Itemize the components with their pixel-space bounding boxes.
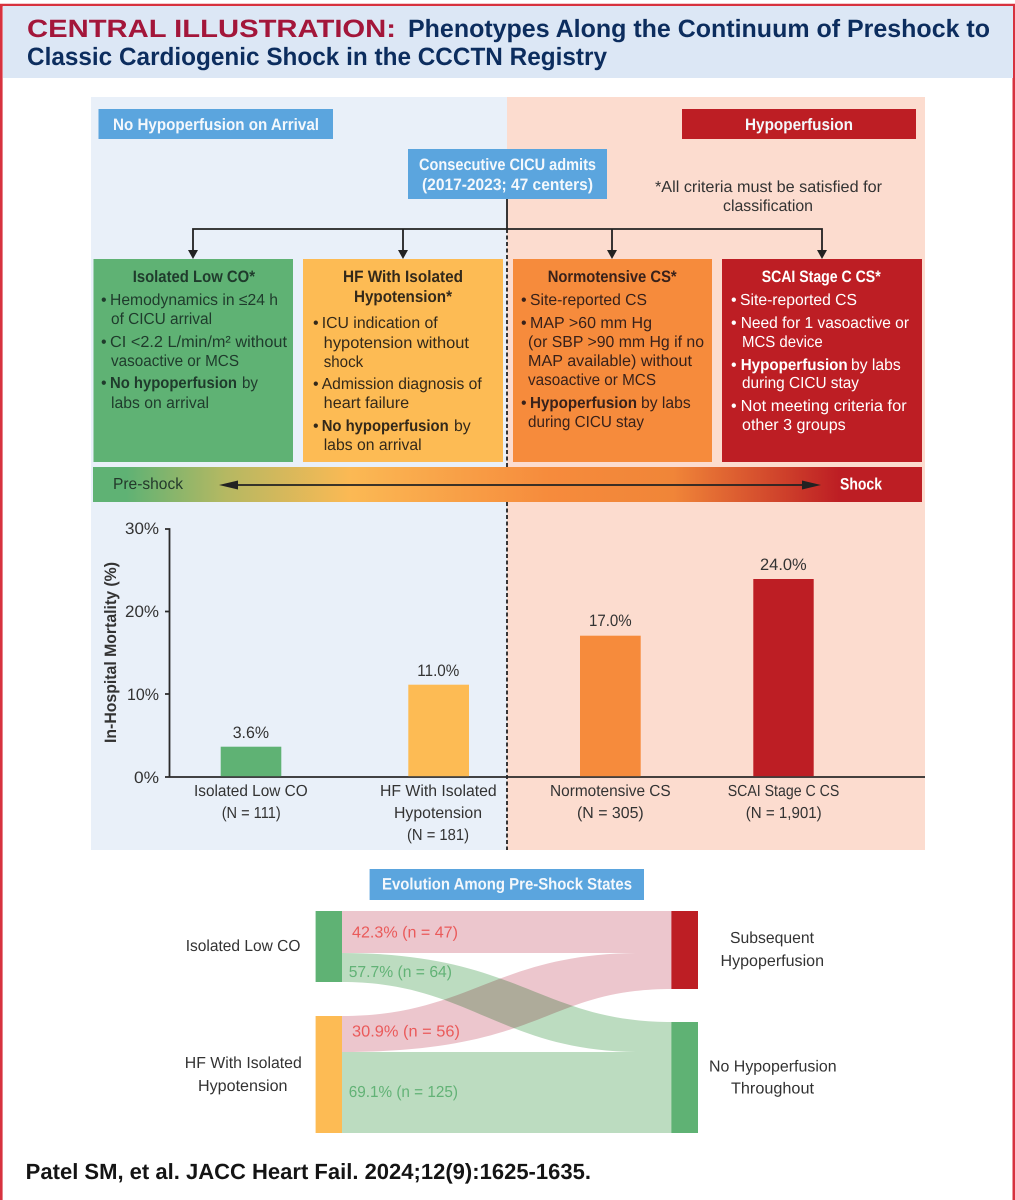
panel: normotensive CS: • [521,395,527,412]
panel: normotensive CS: MAP >60 mm Hg [530,315,652,332]
panel: HF with isolated hypotension: Admission diagnosis of [322,376,482,393]
bar: HF with isolated hypotension: 11.0% [417,662,460,680]
arrow: continuum [219,480,821,490]
bar: HF with isolated hypotension: Hypotension [394,805,482,822]
flow tree arrows [188,199,827,259]
bar: HF with isolated hypotension: HF With Isolated [380,783,497,800]
bar: SCAI stage C CS: 24.0% [760,556,807,574]
title: CENTRAL ILLUSTRATION: [27,15,396,43]
continuum bar: pre-shock to shock: Shock [840,476,883,494]
bar: isolated low CO [194,724,308,822]
panel: SCAI stage C CS: Hypoperfusion [741,357,848,374]
flow: isolated low CO to subsequent hypoperfusion [342,911,672,953]
panel: HF with isolated hypotension: heart failure [324,395,409,412]
panel: normotensive CS [513,259,712,462]
node: isolated low CO [316,911,342,982]
flow labels: 69.1% (n = 125) [349,1084,458,1101]
panel: no hypoperfusion background [91,97,507,850]
panel: normotensive CS: during CICU stay [528,414,644,431]
flow: HF to subsequent hypoperfusion [342,953,672,1052]
outcome labels: Subsequent [730,930,815,947]
outcome labels: Throughout [731,1080,815,1098]
panel: isolated low CO: labs on arrival [111,395,209,412]
panel: SCAI stage C CS: SCAI Stage C CS* [762,268,881,286]
flow: HF to no hypoperfusion [342,1052,672,1133]
chip: hypoperfusion: Hypoperfusion [745,116,853,134]
source labels: Isolated Low CO [186,938,300,955]
panel: SCAI stage C CS: other 3 groups [742,417,846,434]
panel: isolated low CO [94,259,293,462]
panel: HF with isolated hypotension: No hypoperfusion [322,418,449,435]
bar: normotensive CS: 17.0% [589,612,632,630]
panel: isolated low CO: vasoactive or MCS [111,353,239,370]
bar: normotensive CS: Normotensive CS [550,783,671,800]
panel: SCAI stage C CS: during CICU stay [742,375,859,392]
y axis ticks: 0% [134,769,159,787]
bar: SCAI stage C CS: (N = 1,901) [746,805,822,822]
bar: HF with isolated hypotension: (N = 181) [407,827,469,844]
panel: HF with isolated hypotension [303,259,503,462]
bar: normotensive CS [550,612,671,822]
panel: hypoperfusion background [507,97,925,850]
title: Classic Cardiogenic Shock in the CCCTN Registry [27,43,607,71]
sankey diagram [185,911,837,1133]
chip: evolution among pre-shock states [370,869,644,900]
panel: normotensive CS: • [521,315,527,332]
panel: SCAI stage C CS: Not meeting criteria for [741,398,907,415]
citation: Patel SM, et al. JACC Heart Fail. 2024;12(9):1625-1635. [26,1159,591,1184]
panel: SCAI stage C CS: • [731,357,737,374]
title [27,15,990,71]
node: no hypoperfusion throughout [671,1022,698,1133]
bar: isolated low CO: Isolated Low CO [194,783,308,800]
bar: SCAI stage C CS: SCAI Stage C CS [728,783,839,800]
panel: isolated low CO: CI <2.2 L/min/m² without [110,334,288,351]
flow labels: 30.9% (n = 56) [352,1024,460,1040]
panel: isolated low CO: by [242,375,258,392]
header banner [3,6,1013,78]
note: criteria: *All criteria must be satisfied for [655,179,883,196]
panel: SCAI stage C CS: • [731,398,737,415]
panel: isolated low CO: • [101,334,107,351]
panel: normotensive CS: by labs [641,395,691,412]
bar: HF with isolated hypotension [380,662,497,844]
panel: isolated low CO: • [101,292,107,309]
outcome labels [709,930,837,1098]
note: criteria: classification [723,198,813,215]
continuum bar: pre-shock to shock: Pre-shock [113,476,184,493]
panel: HF with isolated hypotension: ICU indication of [322,315,438,332]
y axis label: In-Hospital Mortality (%) [102,562,120,743]
panel: normotensive CS: Hypoperfusion [530,395,637,412]
panel: isolated low CO: No hypoperfusion [110,375,237,392]
flow labels: 57.7% (n = 64) [349,964,452,981]
panel: isolated low CO: Isolated Low CO* [133,268,256,286]
source labels: Hypotension [198,1078,288,1095]
panel: normotensive CS: • [521,292,527,309]
panel: normotensive CS: Site-reported CS [530,292,647,309]
chip: hypoperfusion [682,109,916,139]
panel: HF with isolated hypotension: HF With Isolated [343,268,463,286]
source labels [185,938,302,1095]
panel: HF with isolated hypotension: labs on arrival [324,437,422,454]
chip: no hypoperfusion on arrival [98,109,333,139]
panel: SCAI stage C CS: • [731,292,737,309]
outcome labels: Hypoperfusion [720,953,824,970]
box: consecutive CICU admits: (2017-2023; 47 centers) [422,176,593,194]
flow labels [349,924,460,1101]
bar: SCAI stage C CS [728,556,839,822]
y axis ticks: 30% [125,520,159,538]
node: subsequent hypoperfusion [671,911,698,989]
bar: isolated low CO: 3.6% [233,724,269,742]
panel: HF with isolated hypotension: hypotension without [324,335,470,352]
box: consecutive CICU admits [408,149,607,199]
source labels: HF With Isolated [185,1055,302,1072]
panel: HF with isolated hypotension: • [313,418,319,435]
chip: no hypoperfusion on arrival: No Hypoperfusion on Arrival [113,116,319,134]
title: Phenotypes Along the Continuum of Preshock to [408,15,990,43]
panel: normotensive CS: MAP available) without [528,353,693,370]
panel: SCAI stage C CS: MCS device [742,334,823,351]
panel: SCAI stage C CS: Need for 1 vasoactive or [741,315,910,332]
continuum bar: pre-shock to shock [93,467,922,502]
note: criteria [655,179,883,215]
panel: SCAI stage C CS [722,259,922,462]
panel: SCAI stage C CS: by labs [851,357,901,374]
panel: HF with isolated hypotension: Hypotension* [354,288,453,306]
panel: HF with isolated hypotension: shock [324,354,364,371]
bar: normotensive CS: (N = 305) [577,805,644,822]
panel: normotensive CS: (or SBP >90 mm Hg if no [528,334,704,351]
node: HF with isolated hypotension [316,1016,342,1133]
panel: isolated low CO: Hemodynamics in ≤24 h [110,292,278,309]
bar: isolated low CO: (N = 111) [222,805,281,822]
y axis ticks: 10% [127,686,159,704]
panel: normotensive CS: Normotensive CS* [548,268,677,286]
panel: HF with isolated hypotension: • [313,376,319,393]
flow labels: 42.3% (n = 47) [352,924,458,942]
dashed divider [506,229,508,850]
panel: SCAI stage C CS: Site-reported CS [740,292,857,309]
panel: isolated low CO: of CICU arrival [111,311,212,328]
box: consecutive CICU admits: Consecutive CICU admits [419,156,596,174]
panel: isolated low CO: • [101,375,107,392]
chip: evolution among pre-shock states: Evolution Among Pre-Shock States [382,876,632,894]
panel: HF with isolated hypotension: • [313,315,319,332]
panel: HF with isolated hypotension: by [454,418,471,435]
y axis ticks [125,520,159,787]
outcome labels: No Hypoperfusion [709,1058,837,1076]
y axis ticks: 20% [125,603,159,621]
panel: SCAI stage C CS: • [731,315,737,332]
panel: normotensive CS: vasoactive or MCS [528,372,656,389]
bar chart: in-hospital mortality [102,520,925,844]
flow: isolated low CO to no hypoperfusion [342,953,672,1052]
